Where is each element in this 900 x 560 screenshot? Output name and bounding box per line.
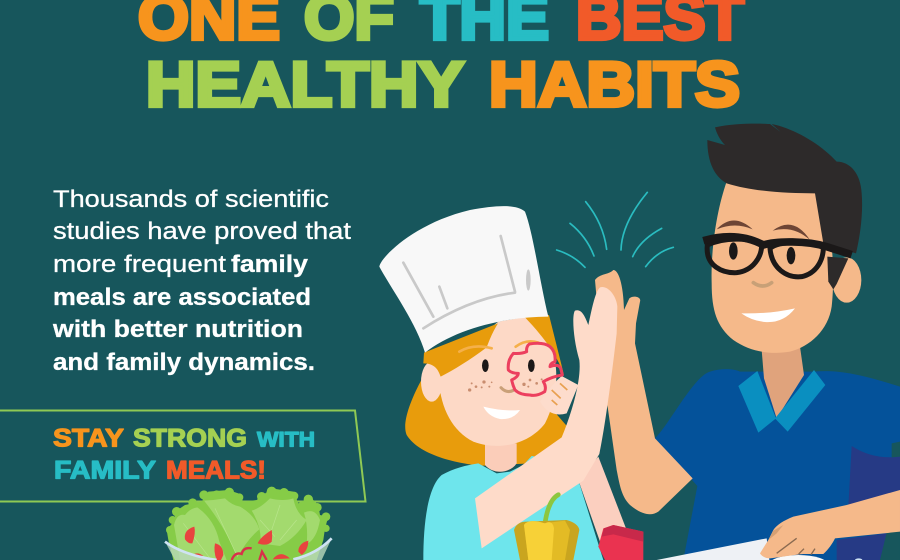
body text block: studies have proved that — [53, 218, 351, 245]
callout: stay strong with family meals — [0, 410, 366, 502]
father shirt shadow — [837, 446, 900, 560]
illustration: father — [595, 124, 900, 560]
girl neck — [485, 443, 517, 472]
girl face — [438, 317, 556, 446]
father smile — [741, 308, 795, 322]
girl hair back — [405, 373, 567, 466]
father neck — [762, 347, 804, 418]
lettuce veins — [183, 505, 297, 558]
glass bowl — [165, 538, 332, 560]
callout: stay strong with family meals: WITH — [257, 428, 315, 452]
girl fringe — [423, 315, 564, 377]
father eyebrows — [717, 220, 810, 240]
body text block: more frequent — [53, 251, 226, 278]
lettuce leaves — [174, 498, 320, 560]
girl hand holding pepper — [540, 376, 578, 414]
red bell pepper — [598, 525, 643, 560]
callout: stay strong with family meals: FAMILY — [54, 456, 156, 484]
tomatoes — [185, 527, 308, 560]
body text block: meals are associated — [53, 284, 311, 311]
lettuce base — [166, 487, 330, 560]
illustration: girl chef — [379, 192, 673, 560]
high-five motion lines — [557, 192, 673, 267]
girl back arm — [578, 457, 626, 542]
father collar — [738, 370, 825, 433]
body text block: family — [231, 251, 309, 278]
red pepper ring — [508, 343, 567, 405]
father face — [712, 182, 833, 353]
body text block: and family dynamics. — [53, 349, 315, 376]
callout: stay strong with family meals: STAY — [53, 424, 124, 452]
small plate rim — [855, 558, 862, 560]
girl nose — [501, 388, 514, 392]
girl smile — [483, 407, 520, 419]
title: HABITS — [489, 50, 740, 120]
father raised arm — [595, 270, 693, 514]
father lower arm and hand — [760, 490, 900, 558]
red onion — [232, 548, 267, 560]
girl freckles — [468, 378, 543, 392]
yellow bell pepper — [514, 495, 579, 560]
girl ear — [421, 362, 442, 402]
body text block — [52, 186, 351, 376]
father nose — [753, 283, 772, 286]
callout: stay strong with family meals: MEALS! — [166, 456, 266, 484]
father glasses — [703, 237, 852, 277]
title — [138, 0, 744, 120]
cutting board — [657, 538, 769, 560]
girl eyebrows — [459, 341, 538, 352]
background gaps in shirt — [880, 442, 900, 560]
father hair — [707, 124, 862, 253]
body text block: with better nutrition — [52, 316, 303, 343]
father shirt — [655, 369, 900, 560]
title: HEALTHY — [146, 50, 464, 120]
plate — [768, 555, 828, 560]
chef hat — [379, 206, 548, 353]
body text block: Thousands of scientific — [53, 186, 329, 213]
girl raised arm — [475, 287, 617, 548]
father ear — [832, 257, 861, 303]
illustration: salad bowl — [165, 487, 332, 560]
father eyes — [729, 242, 795, 264]
callout: stay strong with family meals: STRONG — [133, 424, 247, 452]
girl eyes — [482, 359, 535, 372]
girl shirt — [423, 456, 603, 560]
